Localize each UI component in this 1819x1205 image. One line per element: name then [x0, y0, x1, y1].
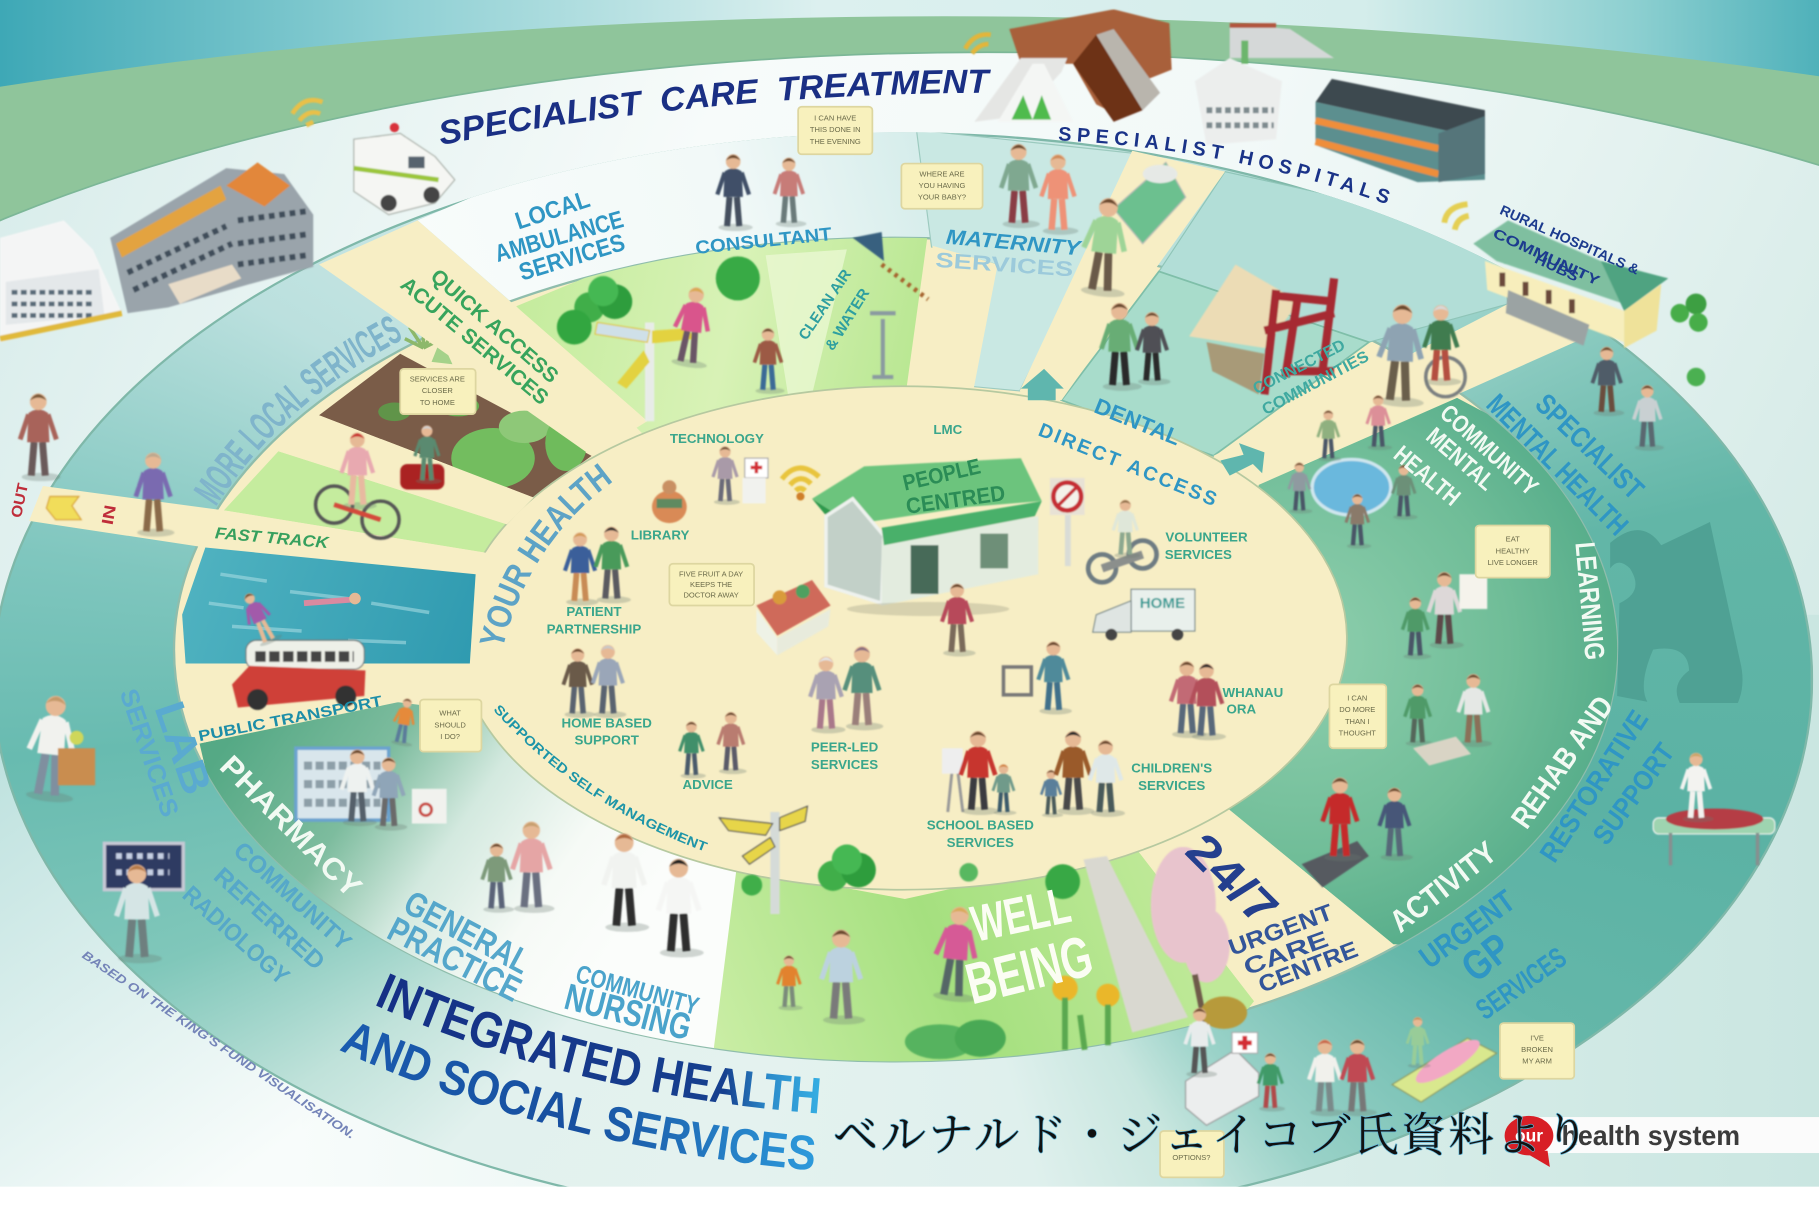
label: learning: LEARNING — [1569, 541, 1611, 661]
small service labels: VOLUNTEER — [1165, 530, 1248, 545]
speech bubble: what should i do: I DO? — [440, 732, 460, 741]
label: general practice: PRACTICE — [382, 910, 527, 1010]
heading: rural hospitals and community hubs: HUBS — [1532, 250, 1581, 284]
label: urgent gp services: SERVICES — [1471, 942, 1573, 1027]
illustration: specialist mental health chat — [1592, 347, 1664, 451]
spoke: maternity strip — [905, 246, 998, 397]
speech bubble: evening: THE EVENING — [810, 137, 861, 146]
label: direct access: DIRECT ACCESS — [1035, 419, 1220, 511]
panel: local ambulance and consultant band — [418, 132, 916, 300]
label: connected communities: COMMUNITIES — [1259, 347, 1372, 419]
illustration: person with walker — [1003, 641, 1072, 715]
speech bubble: evening: I CAN HAVE — [814, 114, 856, 123]
small service labels: SERVICES — [811, 757, 878, 772]
illustration: rural hospital hub — [1473, 220, 1668, 348]
speech bubble: five fruit: FIVE FRUIT A DAY — [679, 570, 743, 579]
speech bubble: eat healthy — [1476, 525, 1550, 578]
heading: specialist hospitals: SPECIALIST HOSPITALS — [1058, 127, 1390, 203]
illustration: signpost park — [595, 322, 696, 421]
logo bar: your health system: our — [1515, 1125, 1543, 1145]
illustration: home van: HOME — [1140, 595, 1185, 612]
label: local ambulance services — [492, 186, 628, 286]
panel: yellow central circle — [458, 386, 1347, 890]
small service labels: PEER-LED — [811, 740, 879, 755]
panel: swimming pool — [182, 548, 476, 664]
label: 24/7: 24/7 — [1176, 823, 1288, 935]
label: community nursing: COMMUNITY — [573, 960, 702, 1021]
label: lab services: LAB — [146, 695, 221, 800]
speech bubble: broken: BROKEN — [1521, 1045, 1553, 1054]
label: maternity services: MATERNITY — [945, 226, 1083, 261]
inner health ring base — [174, 238, 1617, 1061]
label: urgent care centre — [1225, 899, 1361, 998]
label: lab services: SERVICES — [114, 685, 184, 821]
icon: wifi people centred — [782, 468, 819, 501]
label: specialist mental health — [1480, 388, 1650, 542]
speech bubble: what should i do — [420, 699, 481, 752]
spoke: quick access acute services — [319, 220, 647, 456]
label: dental: DENTAL — [1091, 393, 1184, 450]
illustration: father and child — [778, 930, 865, 1025]
house roof label: people centred — [900, 453, 1007, 519]
illustration: white hospital building — [1195, 23, 1334, 145]
illustration: community nurses — [604, 833, 704, 957]
label: urgent gp services — [1413, 883, 1573, 1027]
speech bubble: closer to home: CLOSER — [422, 386, 453, 395]
illustration: left hospital white — [0, 220, 122, 342]
illustration: ambulance — [354, 123, 455, 215]
label: connected communities: CONNECTED — [1250, 336, 1348, 398]
label: clean air and water — [795, 266, 873, 354]
label: urgent care centre: URGENT — [1225, 899, 1336, 961]
label: lab services — [114, 685, 221, 821]
illustration: dental team — [1101, 303, 1171, 391]
label: community referred radiology — [177, 837, 356, 990]
illustration: bush — [1671, 293, 1708, 386]
illustration: urgent GP desk — [1185, 1008, 1285, 1125]
illustration: rehab pair — [1405, 674, 1492, 766]
house roof label: people centred: PEOPLE — [900, 453, 983, 496]
label: quick access acute services: ACUTE SERVICES — [396, 273, 553, 410]
label: maternity services: SERVICES — [935, 249, 1074, 281]
speech bubble: options: OPTIONS? — [1172, 1153, 1210, 1162]
small service labels: PATIENT — [566, 604, 621, 619]
speech bubble: what should i do: SHOULD — [434, 720, 466, 729]
illustration: cyclist and mobility scooter — [316, 425, 444, 538]
speech bubble: broken: I'VE — [1530, 1034, 1544, 1043]
illustration: red bus — [232, 640, 365, 710]
speech bubble: what should i do: WHAT — [439, 709, 461, 718]
speech bubble: do more — [1329, 684, 1386, 748]
illustration: children's services group — [1041, 731, 1125, 817]
caption: japanese source note: ベルナルド・ジェイコブ氏資料より — [833, 1111, 1589, 1161]
panel: yellow urgent care sector — [1136, 806, 1393, 1001]
speech bubble: options — [1160, 1131, 1224, 1177]
illustration: left hospital block — [110, 162, 313, 313]
label: community mental health: MENTAL — [1421, 423, 1500, 496]
title: integrated health: INTEGRATED HEALTH — [376, 974, 820, 1114]
illustration: patient on bed — [1392, 1017, 1496, 1102]
house roof label: people centred: CENTRED — [904, 480, 1007, 519]
small service labels: SERVICES — [947, 835, 1014, 850]
illustration: park trees — [557, 256, 760, 345]
label: well being — [960, 876, 1099, 1017]
label: public transport: PUBLIC TRANSPORT — [197, 693, 385, 745]
small service labels: SCHOOL BASED — [927, 817, 1034, 832]
bottom white margin — [0, 1187, 1819, 1205]
speech bubble: five fruit — [669, 564, 754, 606]
panel: public transport sector — [183, 664, 493, 744]
illustration: therapist and treatment table — [1653, 753, 1775, 865]
label: quick access acute services: QUICK ACCESS — [426, 265, 563, 388]
label: your health: YOUR HEALTH — [479, 463, 612, 643]
label: community referred radiology: COMMUNITY — [228, 837, 356, 956]
speech bubble: five fruit: DOCTOR AWAY — [684, 590, 739, 599]
illustration: marae meeting house — [1189, 264, 1334, 394]
illustration: learning group — [1402, 572, 1487, 659]
speech bubble: eat healthy: LIVE LONGER — [1488, 558, 1538, 567]
illustration: treadmill person — [1302, 777, 1413, 887]
title: specialist care treatment: SPECIALIST CARE TREATMENT — [440, 70, 991, 144]
label: consultant: CONSULTANT — [694, 223, 833, 258]
illustration: blossom tree — [1151, 847, 1230, 1032]
illustration: nurse and hospital bed — [1079, 162, 1186, 299]
small service labels: SERVICES — [1138, 778, 1205, 793]
small service labels: LIBRARY — [631, 527, 690, 542]
label: general practice: GENERAL — [398, 883, 537, 982]
speech bubble: five fruit: KEEPS THE — [690, 580, 732, 589]
speech bubble: do more: I CAN — [1347, 694, 1367, 703]
label: urgent gp services: URGENT — [1413, 883, 1522, 975]
illustration: peer led handshake — [810, 646, 883, 733]
heading: rural hospitals and community hubs: RURAL HOSPITALS & — [1498, 202, 1642, 278]
label: local ambulance services: AMBULANCE — [492, 206, 627, 268]
background: sky gradient — [0, 0, 1819, 348]
puzzle piece — [1610, 522, 1743, 703]
illustration: home based support — [563, 645, 626, 718]
icon: wifi rural hub — [1444, 204, 1469, 230]
illustration: walker out — [20, 393, 61, 481]
small service labels: HOME BASED — [562, 715, 652, 730]
small service labels: TECHNOLOGY — [670, 431, 764, 446]
illustration: whanau ora family — [1171, 661, 1226, 740]
label: specialist mental health: SPECIALIST — [1529, 388, 1650, 506]
illustration: water pump — [870, 313, 896, 377]
illustration: technology user — [713, 446, 768, 505]
speech bubble: closer to home: SERVICES ARE — [410, 375, 465, 384]
illustration: bushes — [905, 1020, 1006, 1059]
logo bar: your health system: health system — [1561, 1120, 1740, 1151]
label: urgent care centre: CENTRE — [1255, 936, 1361, 998]
panel: community mental health, rehab and activity sector — [1225, 398, 1647, 951]
label: community referred radiology: RADIOLOGY — [177, 881, 294, 990]
spoke: fast track — [29, 486, 497, 574]
illustration: library reader — [652, 480, 687, 523]
speech bubble: evening — [798, 107, 872, 154]
illustration: walker in — [136, 453, 174, 537]
illustration: daffodils — [1052, 976, 1119, 1050]
label: well being: WELL — [966, 876, 1075, 953]
illustration: garden path — [1084, 856, 1188, 1032]
illustration: radiology person and x-ray screen — [104, 843, 183, 963]
speech bubble: evening: THIS DONE IN — [810, 125, 861, 134]
label: community nursing — [561, 960, 702, 1048]
panel: park garden sector — [516, 232, 928, 435]
speech bubble: do more: THAN I — [1345, 717, 1370, 726]
label: general practice — [382, 883, 537, 1010]
speech bubble: baby: WHERE ARE — [919, 169, 965, 178]
heading: rural hospitals and community hubs: COMMUNITY — [1491, 225, 1603, 289]
illustration: consultant and patient — [717, 154, 806, 231]
small service labels — [547, 422, 1283, 850]
illustration: fruit stall — [756, 580, 831, 655]
illustration: general practice pair — [482, 822, 555, 913]
label: community mental health: COMMUNITY — [1434, 400, 1543, 501]
panel: maternity sector — [916, 130, 1132, 391]
label: pharmacy: PHARMACY — [213, 750, 368, 904]
logo bar: your health system — [1505, 1116, 1819, 1167]
illustration: well-being trees — [741, 844, 1080, 899]
illustration: maternity couple — [1001, 144, 1078, 235]
illustration: person in water near bus — [237, 588, 283, 648]
label: well being: BEING — [960, 923, 1099, 1017]
illustration: volunteer on motorbike — [1088, 500, 1157, 582]
small service labels: WHANAU — [1223, 685, 1283, 700]
illustration: pharmacy customer — [390, 697, 420, 747]
title: and social services: AND SOCIAL SERVICES — [340, 1024, 814, 1170]
speech bubble: baby — [901, 164, 983, 209]
speech bubble: eat healthy: EAT — [1506, 535, 1520, 544]
small service labels: ORA — [1226, 701, 1256, 716]
panel: upper teal sector — [1159, 172, 1508, 342]
small service labels: LMC — [933, 422, 963, 437]
panel: more local services garden — [224, 322, 592, 554]
label: community mental health — [1388, 400, 1543, 512]
small service labels: CHILDREN'S — [1131, 761, 1212, 776]
speech bubble: do more: THOUGHT — [1339, 728, 1376, 737]
label: maternity services — [935, 226, 1083, 281]
illustration: person centre — [942, 583, 976, 657]
small service labels: ADVICE — [682, 777, 733, 792]
illustration: home van — [1093, 589, 1195, 640]
spoke: garden path — [278, 415, 534, 524]
small service labels: SERVICES — [1165, 547, 1232, 562]
label: community mental health: HEALTH — [1388, 441, 1465, 512]
label: community referred radiology: REFERRED — [208, 863, 330, 976]
speech bubble: baby: YOUR BABY? — [918, 193, 966, 202]
label: specialist mental health: MENTAL HEALTH — [1480, 388, 1634, 542]
label: fast track: FAST TRACK — [214, 524, 330, 552]
note: based on king's fund: BASED ON THE KING'S FUND VISUALISATION. — [80, 948, 358, 1142]
icon: no entry sign — [1050, 478, 1085, 566]
illustration: brick specialist hospital — [974, 9, 1172, 122]
label: local ambulance services: LOCAL — [512, 186, 593, 235]
illustration: doctor and patient — [1309, 1039, 1377, 1116]
label: urgent gp services: GP — [1452, 924, 1520, 991]
illustration: park runner — [670, 285, 717, 370]
spoke: hospital bed path — [1020, 151, 1225, 400]
illustration: carer and wheelchair — [1376, 303, 1465, 408]
icon: in and out arrows — [46, 496, 81, 520]
illustration: orange and teal hospital block — [1316, 79, 1485, 182]
illustration: mental health table group — [1289, 395, 1418, 549]
illustration: patient partnership — [565, 527, 631, 606]
speech bubble: closer to home — [400, 369, 476, 414]
speech bubble: do more: DO MORE — [1339, 705, 1375, 714]
spoke: direct access to rural hub — [1213, 304, 1582, 484]
label: activity: ACTIVITY — [1383, 835, 1503, 939]
label: clean air and water: & WATER — [822, 285, 873, 354]
speech bubble: baby: YOU HAVING — [919, 181, 965, 190]
label: restorative support: SUPPORT — [1586, 737, 1680, 850]
label: restorative support: RESTORATIVE — [1534, 705, 1654, 867]
label: in: IN — [99, 504, 120, 526]
label: urgent care centre: CARE — [1240, 926, 1332, 980]
label: local ambulance services: SERVICES — [516, 229, 628, 286]
speech bubble: closer to home: TO HOME — [420, 398, 455, 407]
illustration: people centred house — [812, 458, 1042, 616]
illustration: lab scientist — [24, 694, 95, 804]
illustration: school based group — [942, 731, 1016, 815]
panel: pharmacy, general practice, nursing sector — [200, 702, 742, 1079]
illustration: pink runner — [931, 905, 985, 1004]
icon: wifi brick hospital — [965, 35, 991, 53]
label: out: OUT — [8, 481, 32, 519]
illustration: park girl — [754, 328, 785, 394]
speech bubble: eat healthy: HEALTHY — [1496, 546, 1530, 555]
arrow: direct access right arrow — [1220, 443, 1264, 476]
label: community nursing: NURSING — [561, 975, 696, 1048]
label: supported self management: SUPPORTED SELF MANAGEMENT — [494, 705, 708, 850]
panel: well-being garden — [710, 848, 1254, 1079]
label: clean air and water: CLEAN AIR — [795, 266, 855, 343]
illustration: kite — [853, 232, 928, 299]
illustration: advice pair — [680, 712, 747, 778]
speech bubble: broken — [1500, 1023, 1574, 1079]
illustration: pharmacy shop and staff — [296, 748, 447, 831]
label: rehab and: REHAB AND — [1505, 690, 1620, 835]
small service labels: PARTNERSHIP — [547, 621, 641, 636]
icon: wifi left hospital — [292, 100, 323, 125]
arrow: direct access up arrow — [1021, 369, 1064, 400]
panel: connected communities sector — [1061, 271, 1369, 456]
small service labels: SUPPORT — [575, 733, 639, 748]
speech bubble: broken: MY ARM — [1522, 1057, 1552, 1066]
illustration: turtle — [1201, 996, 1247, 1029]
label: more local services: MORE LOCAL SERVICES — [194, 316, 401, 506]
illustration: signpost well-being — [719, 806, 807, 914]
